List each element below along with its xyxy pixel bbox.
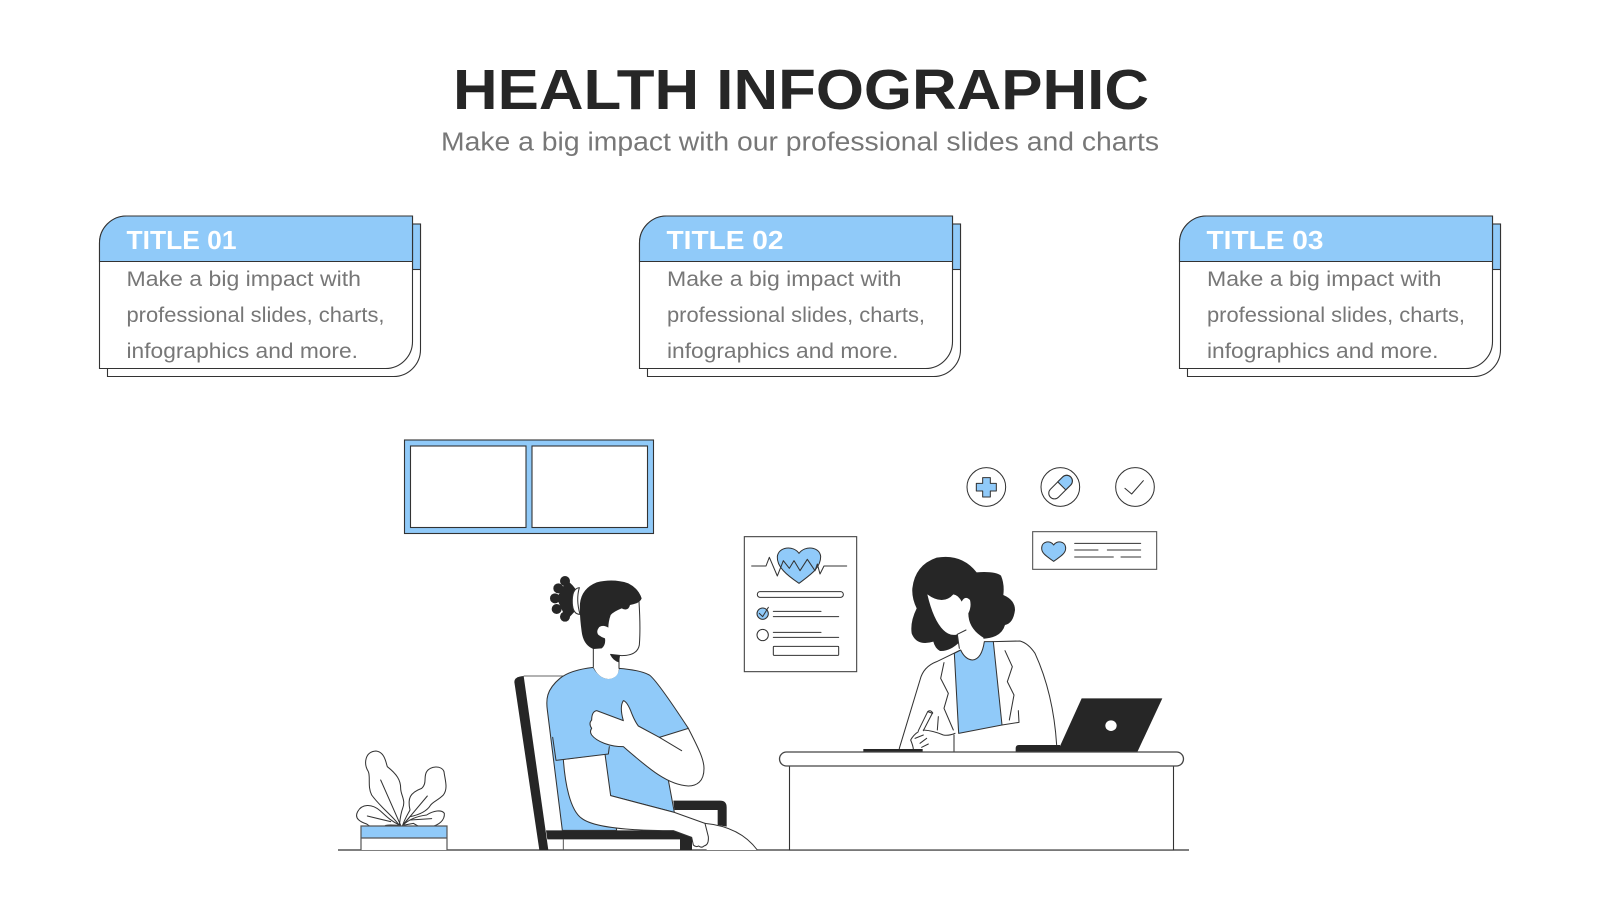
window bbox=[404, 440, 654, 534]
patient leg and lower arm bbox=[563, 754, 708, 847]
left sleeve bbox=[550, 717, 609, 760]
panel: title 02: TITLE 02 bbox=[666, 225, 784, 255]
panel: title 01: TITLE 01 bbox=[126, 225, 236, 255]
coat bbox=[899, 641, 1057, 752]
face bbox=[603, 602, 640, 656]
panel: title 02: Make a big impact with bbox=[667, 268, 902, 291]
panel: title 03: infographics and more. bbox=[1207, 340, 1438, 363]
panel: title 03: professional slides, charts, bbox=[1207, 304, 1465, 327]
icon: pill bbox=[1041, 468, 1080, 506]
ground line bbox=[338, 849, 1189, 851]
patient head bbox=[550, 576, 642, 679]
neck bbox=[593, 645, 619, 679]
panel: title 03: Make a big impact with bbox=[1207, 268, 1442, 291]
panel: title 01: professional slides, charts, bbox=[126, 304, 384, 327]
panel: title 01: Make a big impact with bbox=[126, 268, 361, 291]
hand with pen bbox=[911, 711, 955, 751]
patient thigh bbox=[705, 823, 757, 850]
panel: title 01 bbox=[100, 216, 420, 376]
panel: title 02: infographics and more. bbox=[667, 340, 898, 363]
illustration: patient on chair bbox=[514, 576, 757, 850]
chair bbox=[514, 676, 727, 850]
hair bbox=[580, 581, 642, 649]
icon: check mark bbox=[1116, 468, 1154, 506]
neck shadow bbox=[610, 654, 620, 662]
heart info card bbox=[1033, 532, 1157, 569]
desk bbox=[780, 752, 1184, 850]
doctor hair bbox=[911, 557, 1015, 660]
neck lines bbox=[593, 648, 619, 668]
medical report bbox=[744, 537, 857, 672]
title: HEALTH INFOGRAPHIC bbox=[453, 58, 1149, 122]
patient torso bbox=[547, 667, 688, 830]
bun bbox=[550, 576, 580, 622]
panel: title 02 bbox=[640, 216, 960, 376]
icon: medical cross bbox=[967, 468, 1006, 506]
raised arm and hand bbox=[590, 701, 704, 786]
panel: title 03: TITLE 03 bbox=[1206, 225, 1324, 255]
coat details bbox=[941, 651, 1019, 730]
panel: title 01: infographics and more. bbox=[126, 340, 358, 363]
shirt bbox=[954, 642, 1002, 733]
laptop bbox=[1016, 698, 1162, 752]
panel: title 02: professional slides, charts, bbox=[667, 304, 925, 327]
illustration: plant bbox=[357, 751, 447, 850]
illustration: doctor bbox=[863, 557, 1162, 752]
face and neck bbox=[927, 594, 984, 660]
subtitle: Make a big impact with our professional slides and charts bbox=[441, 128, 1159, 156]
notebook bbox=[863, 749, 923, 752]
panel: title 03 bbox=[1180, 216, 1500, 376]
